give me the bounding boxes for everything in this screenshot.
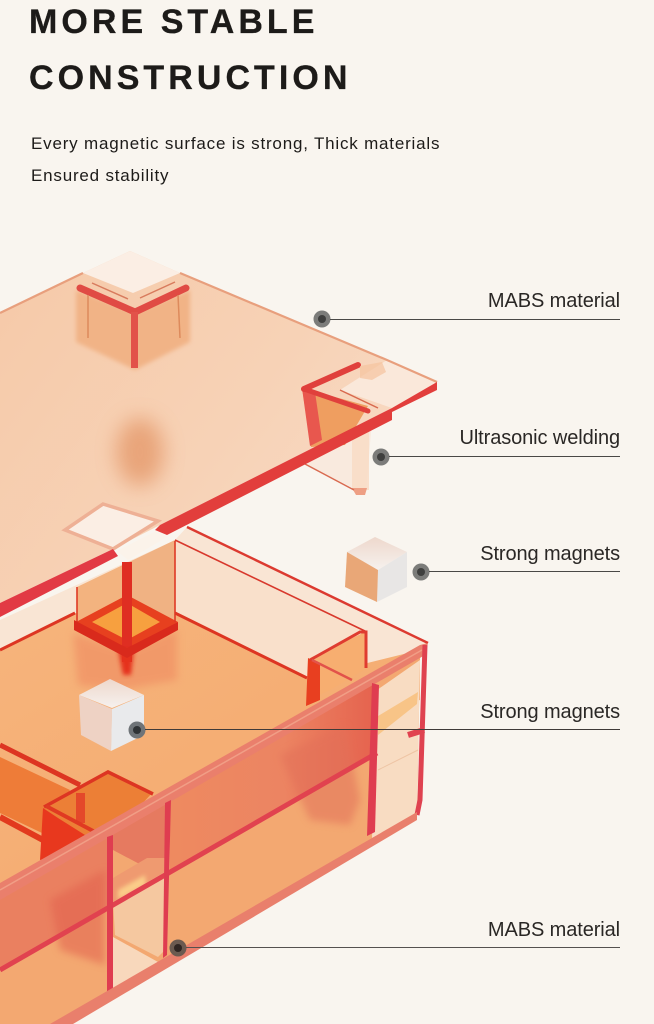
callout: Strong magnets upper [412, 564, 620, 580]
title [29, 3, 351, 97]
magnet lower [79, 679, 144, 751]
box red seams [0, 753, 377, 970]
box bottom edge [50, 812, 417, 1024]
lid front edge [155, 382, 437, 535]
label: Strong magnets lower: Strong magnets [480, 701, 620, 723]
description text [31, 134, 440, 185]
corner post front left [40, 770, 153, 860]
lid corner post right [302, 362, 386, 447]
callout: MABS material top [314, 310, 620, 328]
title: CONSTRUCTION [29, 59, 351, 97]
magnet upper [345, 537, 407, 602]
box front wall sections [0, 655, 420, 1024]
box floor [0, 613, 420, 895]
lid [0, 251, 437, 617]
blurred corner post shadow [116, 418, 164, 486]
lid corner post top left [76, 282, 190, 370]
callout: Ultrasonic welding [372, 448, 620, 466]
box back wall and rim [0, 527, 428, 890]
box rim top [0, 643, 428, 900]
description text: Ensured stability [31, 166, 169, 185]
corner post right [306, 632, 367, 706]
callout: Strong magnets lower [128, 722, 620, 738]
corner post back [73, 540, 178, 690]
label: Strong magnets upper: Strong magnets [480, 543, 620, 565]
lid corner clear panels [83, 251, 180, 293]
title: MORE STABLE [29, 3, 318, 41]
label: MABS material top: MABS material [488, 290, 620, 312]
lid surface [0, 251, 437, 603]
callout: MABS material bottom [170, 940, 620, 956]
label: MABS material bottom: MABS material [488, 919, 620, 941]
description text: Every magnetic surface is strong, Thick materials [31, 134, 440, 153]
lower box [0, 527, 428, 1024]
label: Ultrasonic welding: Ultrasonic welding [460, 427, 620, 449]
lid corner tabs behind [307, 420, 372, 492]
